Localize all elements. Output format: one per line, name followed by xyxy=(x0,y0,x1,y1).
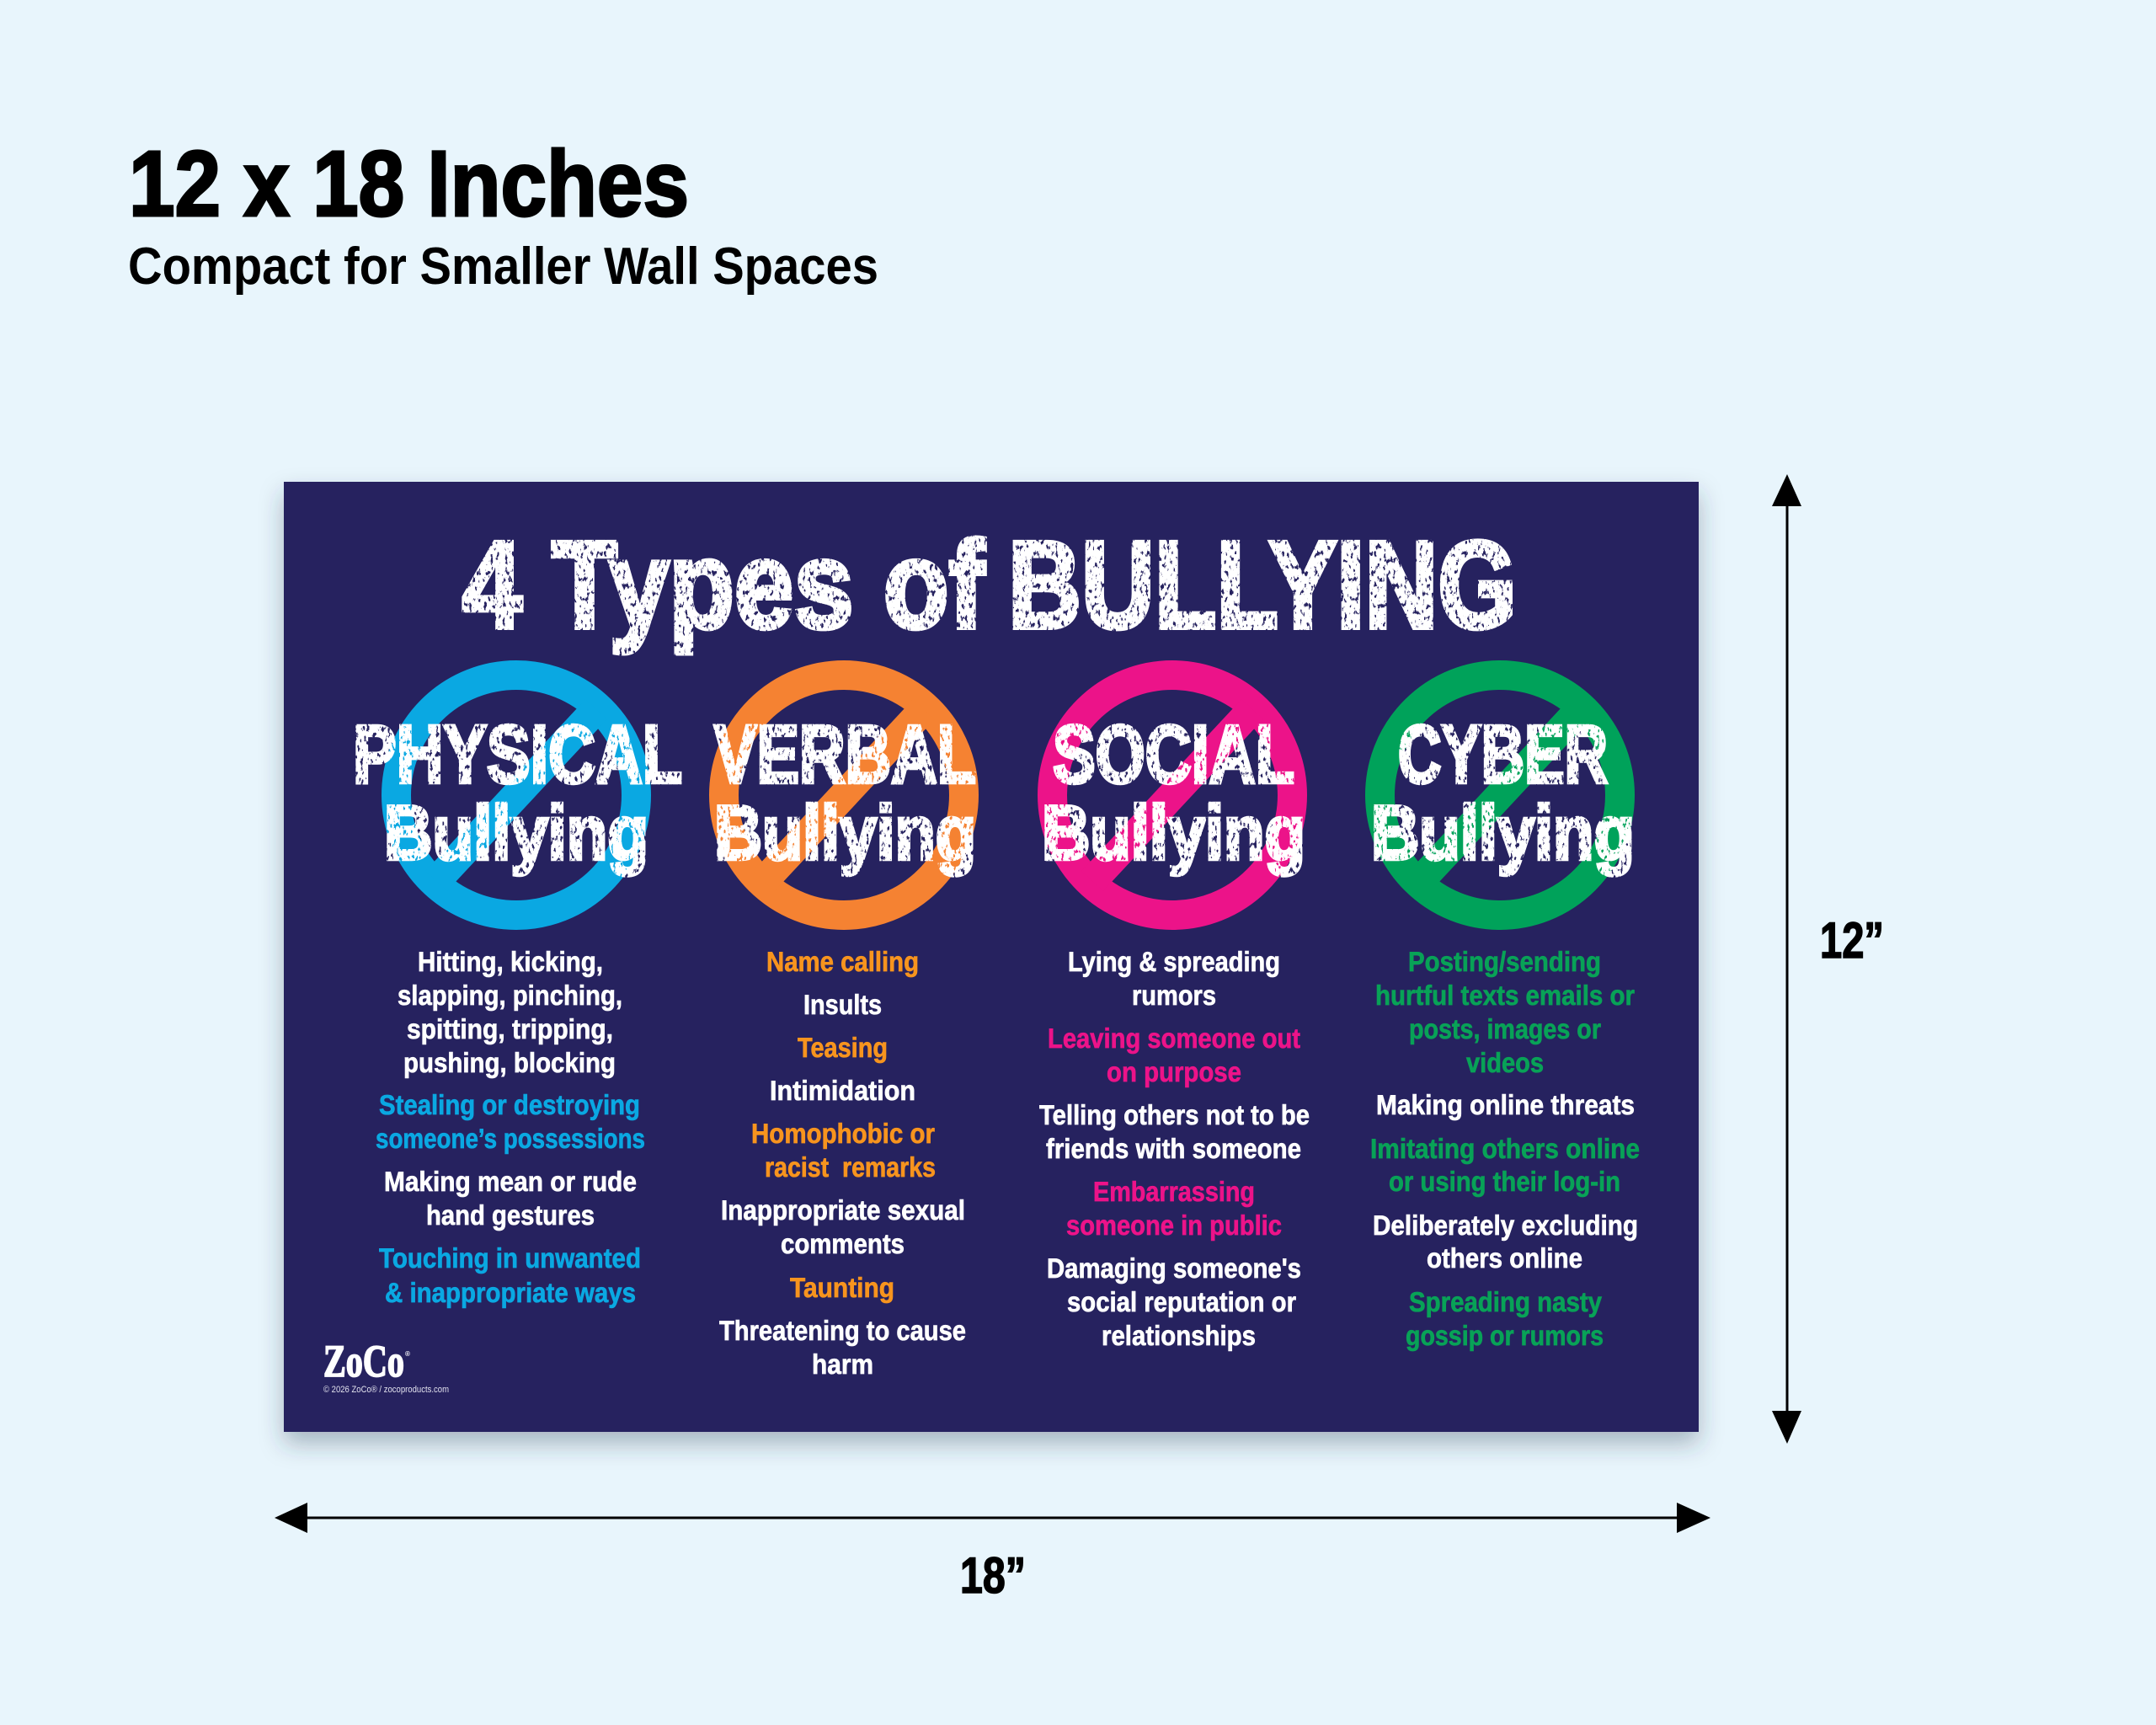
arrow: vertical 12 inch dimension xyxy=(1772,474,1801,1444)
list: cyber bullying behaviours: Spreading nasty xyxy=(1409,1286,1603,1317)
list: verbal bullying behaviours: Intimidation xyxy=(770,1075,915,1106)
list: cyber bullying behaviours: others online xyxy=(1427,1242,1582,1274)
panel: cyber bullying xyxy=(1370,676,1640,1351)
heading: cyber bullying: Bullying xyxy=(1371,791,1635,876)
panel: physical bullying xyxy=(353,676,682,1308)
list: physical bullying behaviours: pushing, blocking xyxy=(403,1047,616,1078)
heading: physical bullying: Bullying xyxy=(384,791,648,876)
list: physical bullying behaviours xyxy=(376,946,645,1308)
list: social bullying behaviours: Leaving someone out xyxy=(1048,1023,1300,1054)
list: social bullying behaviours: relationships xyxy=(1102,1320,1256,1351)
list: physical bullying behaviours: spitting, tripping, xyxy=(407,1013,613,1044)
heading: verbal bullying: VERBAL xyxy=(714,708,976,800)
heading: physical bullying xyxy=(353,708,682,876)
list: social bullying behaviours: social reputation or xyxy=(1067,1286,1296,1317)
list: verbal bullying behaviours: Teasing xyxy=(798,1032,888,1063)
subheading: compact for smaller wall spaces: Compact for Smaller Wall Spaces xyxy=(128,238,878,296)
heading: physical bullying: PHYSICAL xyxy=(353,708,682,800)
heading: social bullying: Bullying xyxy=(1042,791,1305,876)
logo: ZoCo with copyright: ZoCo xyxy=(323,1336,404,1386)
list: verbal bullying behaviours: Taunting xyxy=(790,1272,894,1303)
label: 18 inch width: 18” xyxy=(960,1547,1026,1604)
list: verbal bullying behaviours xyxy=(719,946,966,1380)
list: verbal bullying behaviours: Threatening to cause xyxy=(719,1315,966,1346)
list: physical bullying behaviours: Hitting, kicking, xyxy=(418,946,603,977)
list: social bullying behaviours xyxy=(1039,946,1310,1351)
list: cyber bullying behaviours: posts, images or xyxy=(1409,1013,1601,1044)
list: social bullying behaviours: rumors xyxy=(1132,980,1216,1011)
list: physical bullying behaviours: Touching in unwanted xyxy=(379,1242,641,1274)
list: cyber bullying behaviours: Posting/sending xyxy=(1408,946,1601,977)
list: social bullying behaviours: Damaging someone's xyxy=(1047,1252,1301,1284)
list: cyber bullying behaviours: gossip or rumors xyxy=(1406,1320,1604,1351)
list: verbal bullying behaviours: racist remarks xyxy=(765,1151,936,1183)
list: physical bullying behaviours: slapping, pinching, xyxy=(398,980,622,1011)
heading: verbal bullying: Bullying xyxy=(714,791,976,876)
list: cyber bullying behaviours: Deliberately excluding xyxy=(1373,1210,1638,1241)
icon: pink prohibition sign xyxy=(1053,676,1292,915)
arrow: horizontal 18 inch dimension xyxy=(275,1503,1710,1533)
panel: verbal bullying xyxy=(714,676,976,1380)
list: physical bullying behaviours: someone’s possessions xyxy=(376,1123,645,1154)
poster title: 4 Types of xyxy=(462,516,985,654)
heading: verbal bullying xyxy=(714,708,976,876)
list: verbal bullying behaviours: Name calling xyxy=(766,946,919,977)
list: verbal bullying behaviours: Insults xyxy=(803,989,882,1020)
list: social bullying behaviours: Telling others not to be xyxy=(1039,1099,1310,1130)
list: cyber bullying behaviours: or using their log-in xyxy=(1389,1166,1620,1197)
heading: 12 x 18 Inches: 12 x 18 Inches xyxy=(129,132,689,236)
heading: cyber bullying xyxy=(1371,708,1635,876)
poster background xyxy=(284,482,1699,1432)
logo: ZoCo with copyright: © 2026 ZoCo® / zocoproducts.com xyxy=(323,1385,449,1395)
list: social bullying behaviours: someone in public xyxy=(1066,1210,1282,1241)
icon: blue prohibition sign xyxy=(396,676,637,915)
list: physical bullying behaviours: hand gestures xyxy=(426,1199,595,1231)
list: social bullying behaviours: Lying & spreading xyxy=(1068,946,1280,977)
list: social bullying behaviours: on purpose xyxy=(1107,1056,1241,1087)
list: verbal bullying behaviours: Homophobic or xyxy=(751,1118,935,1149)
icon: green prohibition sign xyxy=(1380,676,1620,915)
label: 12 inch height: 12” xyxy=(1820,912,1884,969)
heading: social bullying: SOCIAL xyxy=(1053,708,1294,800)
list: cyber bullying behaviours xyxy=(1370,946,1640,1351)
list: verbal bullying behaviours: Inappropriate sexual xyxy=(721,1194,965,1226)
list: physical bullying behaviours: Stealing or destroying xyxy=(379,1089,640,1120)
panel: social bullying xyxy=(1039,676,1310,1351)
list: cyber bullying behaviours: hurtful texts emails or xyxy=(1375,980,1635,1011)
list: verbal bullying behaviours: comments xyxy=(781,1228,905,1259)
list: cyber bullying behaviours: videos xyxy=(1466,1047,1544,1078)
panel: bullying poster xyxy=(284,482,1699,1432)
list: cyber bullying behaviours: Making online threats xyxy=(1376,1089,1635,1120)
icon: orange prohibition sign xyxy=(724,676,963,915)
list: physical bullying behaviours: Making mean or rude xyxy=(384,1166,637,1197)
heading: cyber bullying: CYBER xyxy=(1398,708,1608,800)
logo: ZoCo with copyright: ® xyxy=(405,1350,410,1358)
list: cyber bullying behaviours: Imitating others online xyxy=(1370,1133,1640,1164)
list: social bullying behaviours: Embarrassing xyxy=(1093,1176,1255,1207)
list: verbal bullying behaviours: harm xyxy=(812,1348,873,1380)
list: physical bullying behaviours: & inappropriate ways xyxy=(385,1277,636,1308)
poster title xyxy=(462,516,1517,654)
heading: social bullying xyxy=(1042,708,1305,876)
list: social bullying behaviours: friends with someone xyxy=(1046,1133,1301,1164)
poster title: BULLYING xyxy=(1008,516,1517,654)
